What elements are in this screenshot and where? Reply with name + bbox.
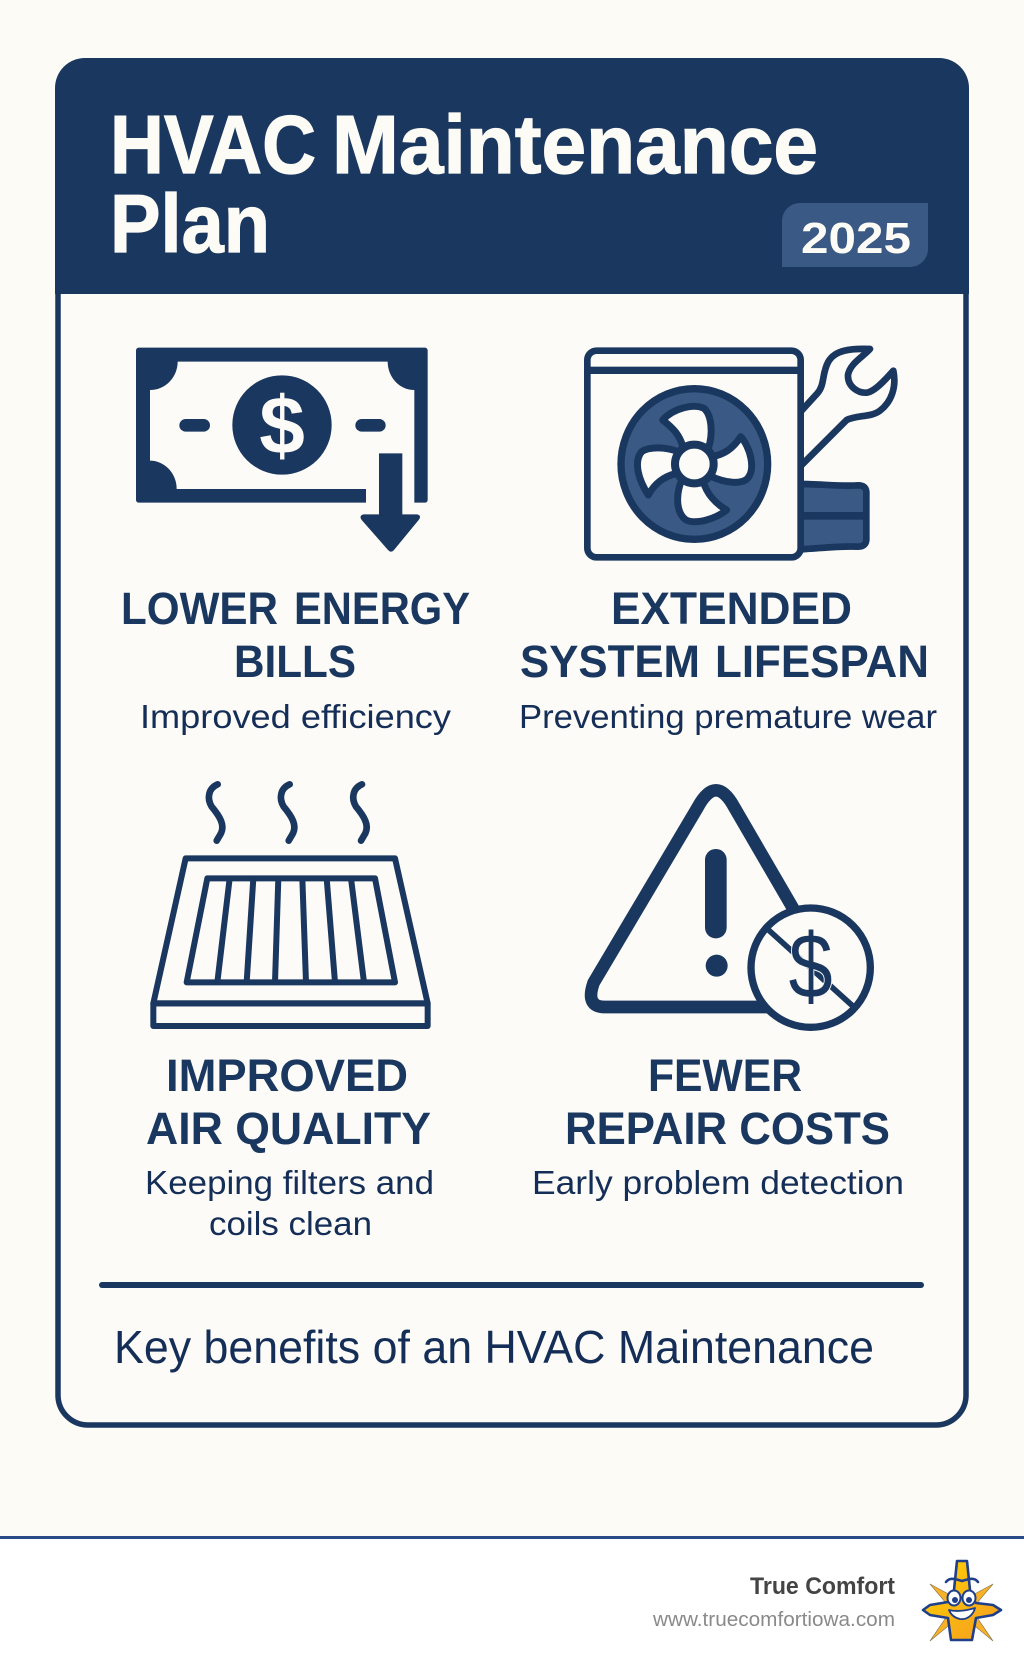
heading: AIR QUALITY bbox=[146, 1103, 431, 1154]
title bbox=[110, 98, 818, 270]
year badge bbox=[782, 203, 928, 267]
heading: REPAIR COSTS bbox=[565, 1103, 890, 1154]
icon: warning triangle with crossed dollar bbox=[591, 790, 870, 1027]
heading: LOWER bbox=[121, 583, 278, 634]
heading: IMPROVED bbox=[166, 1050, 408, 1101]
rising air bbox=[209, 784, 367, 841]
no-dollar circle bbox=[751, 908, 870, 1027]
benefit: fewer repair costs bbox=[532, 790, 904, 1201]
heading bbox=[520, 583, 929, 687]
title: Plan bbox=[110, 177, 270, 270]
benefit: lower energy bills bbox=[121, 348, 470, 735]
description bbox=[145, 1164, 434, 1242]
heading: LIFESPAN bbox=[715, 636, 929, 687]
benefit: improved air quality bbox=[145, 784, 434, 1242]
heading bbox=[565, 1050, 890, 1154]
heading: ENERGY bbox=[294, 583, 470, 634]
footer bbox=[0, 1536, 1024, 1666]
description: Preventing premature wear bbox=[519, 698, 937, 735]
icon: banknote with down arrow: $ bbox=[259, 380, 305, 471]
description: coils clean bbox=[209, 1205, 372, 1242]
benefit: extended system lifespan bbox=[519, 349, 937, 735]
heading: FEWER bbox=[648, 1050, 802, 1101]
panel: main card bbox=[55, 58, 969, 1425]
icon: air filter with rising air bbox=[153, 784, 428, 1026]
caption: Key benefits of an HVAC Maintenance bbox=[114, 1321, 874, 1373]
heading: EXTENDED bbox=[611, 583, 852, 634]
title: Maintenance bbox=[332, 98, 818, 191]
year badge: 2025 bbox=[801, 214, 911, 263]
fan bbox=[621, 389, 768, 539]
icon: outdoor unit with fan and wrench bbox=[587, 349, 894, 557]
wrench bbox=[801, 349, 894, 466]
icon: star mascot bbox=[923, 1561, 1001, 1641]
no-dollar circle: $ bbox=[789, 916, 833, 1018]
title: HVAC bbox=[110, 98, 316, 191]
header band bbox=[55, 58, 969, 294]
description: Early problem detection bbox=[532, 1164, 904, 1201]
website: www.truecomfortiowa.com bbox=[652, 1609, 895, 1631]
description: Keeping filters and bbox=[145, 1164, 434, 1201]
heading bbox=[121, 583, 470, 687]
coil block bbox=[801, 484, 866, 549]
unit housing bbox=[587, 351, 801, 557]
heading bbox=[146, 1050, 431, 1154]
filter frame bbox=[153, 858, 428, 1026]
icon: banknote with down arrow bbox=[136, 348, 428, 552]
heading: SYSTEM bbox=[520, 636, 700, 687]
description: Improved efficiency bbox=[140, 698, 452, 735]
heading: BILLS bbox=[234, 636, 356, 687]
brand name: True Comfort bbox=[750, 1573, 895, 1600]
